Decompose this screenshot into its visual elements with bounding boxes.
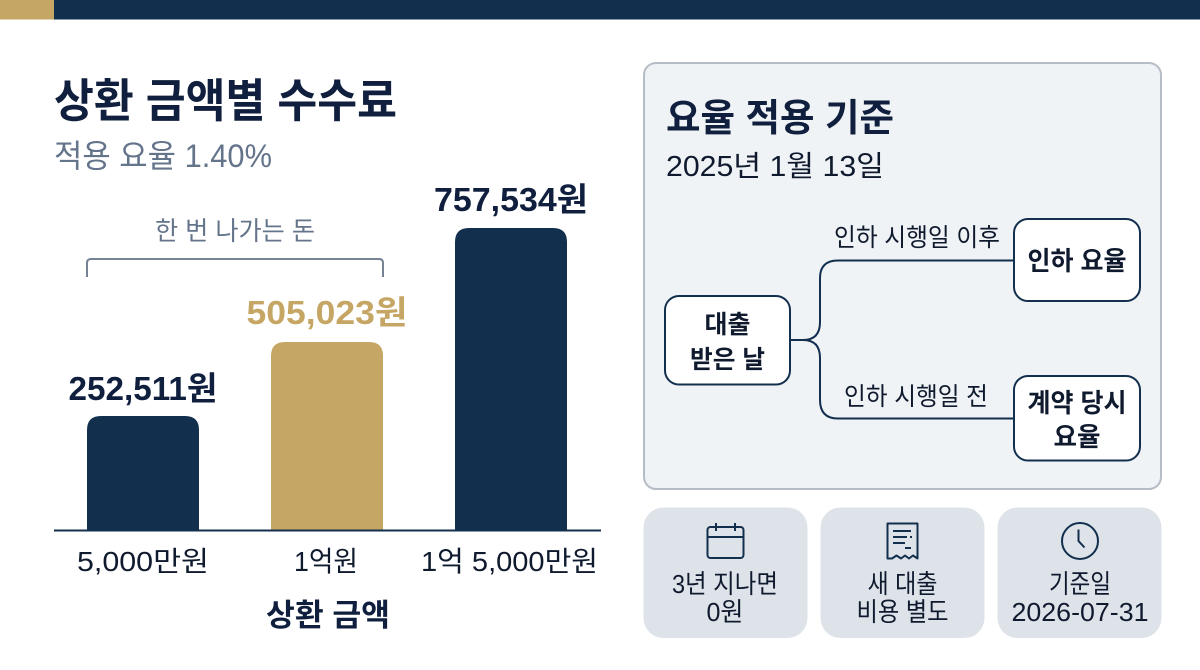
bracket label: 한 번 나가는 돈 xyxy=(155,216,315,246)
panel heading: 요율 적용 기준 xyxy=(666,98,894,140)
bar: 5,000만원 xyxy=(68,370,218,530)
bar: 1억원 xyxy=(246,294,408,530)
card text xyxy=(856,569,948,627)
title: 상환 금액별 수수료 xyxy=(54,75,397,127)
icon: calendar xyxy=(708,523,744,558)
card text: 3년 지나면 xyxy=(672,569,778,599)
panel: rate criteria xyxy=(644,63,1161,489)
card text xyxy=(672,569,778,627)
branch label: before: 인하 시행일 전 xyxy=(844,383,988,411)
icon: receipt xyxy=(888,524,918,558)
bar chart xyxy=(54,181,601,633)
card text: 비용 별도 xyxy=(856,597,948,627)
subtitle: 적용 요율 1.40% xyxy=(54,138,272,174)
panel date: 2025년 1월 13일 xyxy=(666,150,884,183)
node: loan date: 받은 날 xyxy=(690,346,765,374)
card: new loan costs xyxy=(820,508,984,638)
branch label: after: 인하 시행일 이후 xyxy=(834,224,1000,252)
bar: 1억원: 505,023원 xyxy=(246,294,408,331)
node: reduced rate xyxy=(1014,219,1140,301)
card text: 2026-07-31 xyxy=(1012,597,1148,627)
card: base date xyxy=(998,508,1162,638)
axis labels: 1억 5,000만원 xyxy=(421,546,598,577)
card text: 0원 xyxy=(706,597,744,627)
node: contract rate: 요율 xyxy=(1054,422,1100,452)
card text: 기준일 xyxy=(1049,569,1111,599)
connector lines xyxy=(791,260,1014,418)
bar: 5,000만원: 252,511원 xyxy=(68,370,218,407)
bar: 1억 5,000만원: 757,534원 xyxy=(434,181,588,218)
axis labels: 1억원 xyxy=(294,546,358,577)
node: reduced rate: 인하 요율 xyxy=(1028,246,1126,276)
card text: 새 대출 xyxy=(868,569,938,599)
axis labels xyxy=(77,546,598,577)
bar: 1억 5,000만원 xyxy=(434,181,588,530)
axis labels: 5,000만원 xyxy=(77,546,209,577)
top accent bar xyxy=(0,0,1200,20)
axis title: 상환 금액 xyxy=(266,598,390,633)
bracket label xyxy=(87,216,383,277)
card text xyxy=(1012,569,1148,627)
node: loan date xyxy=(665,296,790,384)
card: 3 years xyxy=(644,508,808,638)
node: contract rate xyxy=(1014,376,1140,460)
axis line xyxy=(54,530,601,532)
node: loan date: 대출 xyxy=(704,311,750,339)
icon: clock xyxy=(1062,523,1098,559)
node: contract rate: 계약 당시 xyxy=(1028,388,1126,418)
